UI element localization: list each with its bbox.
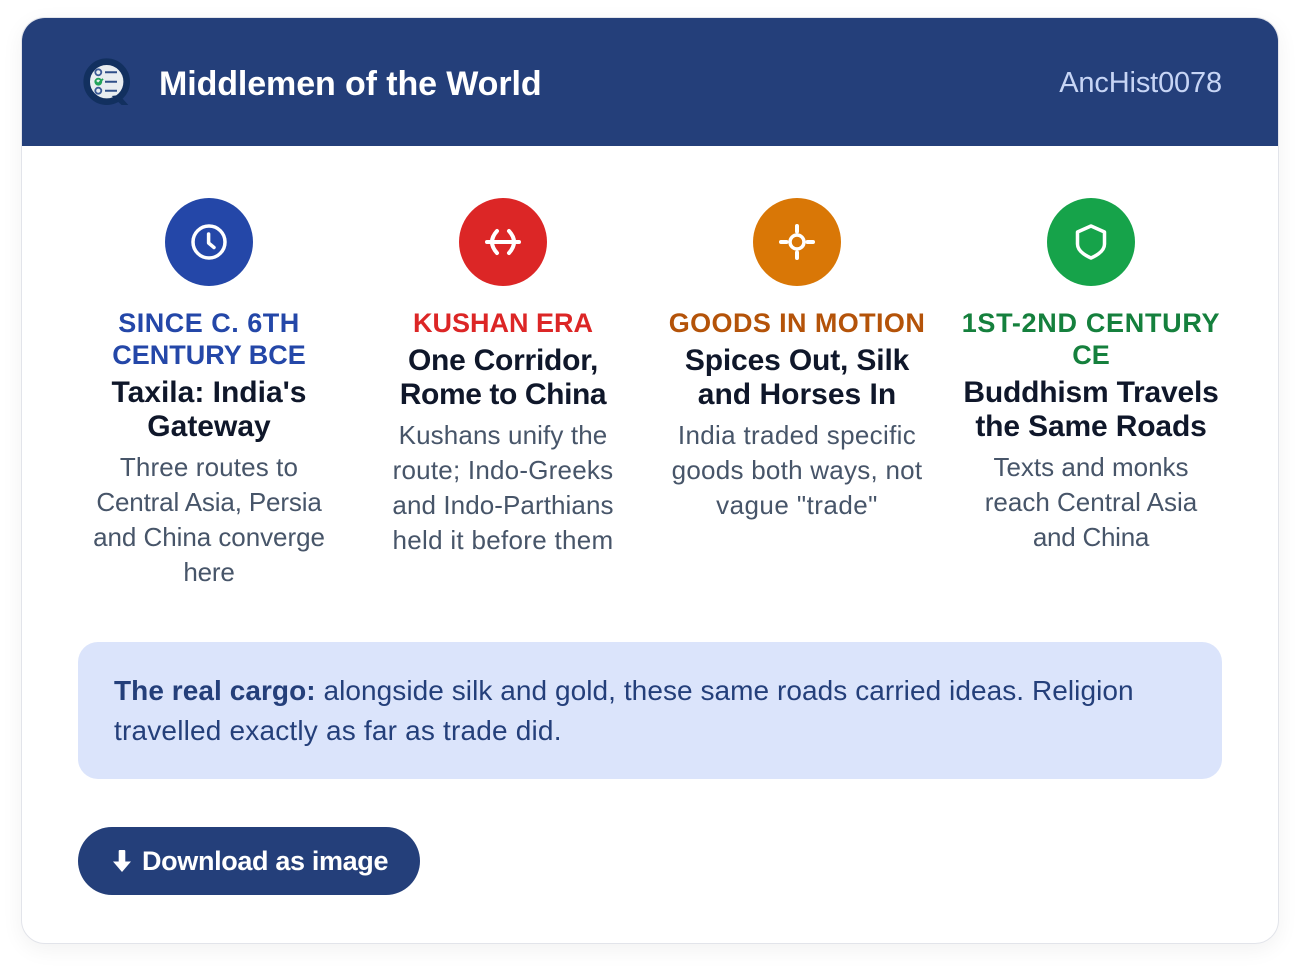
- header logo icon: [84, 58, 130, 105]
- description line 3: and China: [1033, 522, 1149, 552]
- description line 2: reach Central Asia: [985, 487, 1197, 517]
- column 4: Buddhism: [962, 198, 1220, 552]
- description line 3: vague "trade": [716, 490, 878, 520]
- description: Kushans unify the: [399, 420, 607, 450]
- description: Three routes to: [120, 452, 298, 482]
- eyebrow: GOODS IN MOTION: [669, 308, 925, 338]
- heading: Taxila: India's: [112, 376, 306, 409]
- description: India traded specific: [678, 420, 916, 450]
- heading: Spices Out, Silk: [685, 344, 909, 377]
- column 1: Taxila: [93, 198, 325, 587]
- heading: One Corridor,: [408, 344, 598, 377]
- callout line 1: The real cargo: alongside silk and gold, these same roads carried ideas. Religion: [114, 675, 1134, 706]
- heading: Buddhism Travels: [963, 376, 1219, 409]
- icon: shield: [1047, 198, 1135, 286]
- callout: [78, 642, 1222, 779]
- eyebrow: KUSHAN ERA: [413, 308, 593, 338]
- description line 2: Central Asia, Persia: [96, 487, 322, 517]
- description line 3: and China converge: [93, 522, 325, 552]
- button label: Download as image: [142, 846, 388, 876]
- reference code: AncHist0078: [1059, 67, 1222, 99]
- header band: [22, 18, 1278, 146]
- heading line 2: and Horses In: [698, 378, 896, 411]
- eyebrow line 2: CE: [1072, 340, 1110, 370]
- column 2: Kushan Era: [392, 198, 614, 555]
- description line 4: here: [183, 557, 235, 587]
- description line 4: held it before them: [392, 525, 614, 555]
- description line 2: route; Indo-Greeks: [393, 455, 613, 485]
- icon: corridor arrows: [459, 198, 547, 286]
- description line 2: goods both ways, not: [672, 455, 922, 485]
- description: Texts and monks: [993, 452, 1189, 482]
- download button: [78, 827, 420, 895]
- eyebrow: 1ST-2ND CENTURY: [962, 308, 1220, 338]
- column 3: Goods in Motion: [669, 198, 925, 520]
- title: Middlemen of the World: [159, 65, 542, 103]
- heading line 2: Gateway: [147, 410, 271, 443]
- description line 3: and Indo-Parthians: [392, 490, 614, 520]
- icon: down arrow: [113, 850, 131, 872]
- callout line 2: travelled exactly as far as trade did.: [114, 715, 562, 746]
- icon: crosshair: [753, 198, 841, 286]
- heading line 2: Rome to China: [400, 378, 606, 411]
- eyebrow line 2: CENTURY BCE: [112, 340, 306, 370]
- icon: clock: [165, 198, 253, 286]
- eyebrow: SINCE C. 6TH: [118, 308, 300, 338]
- heading line 2: the Same Roads: [975, 410, 1207, 443]
